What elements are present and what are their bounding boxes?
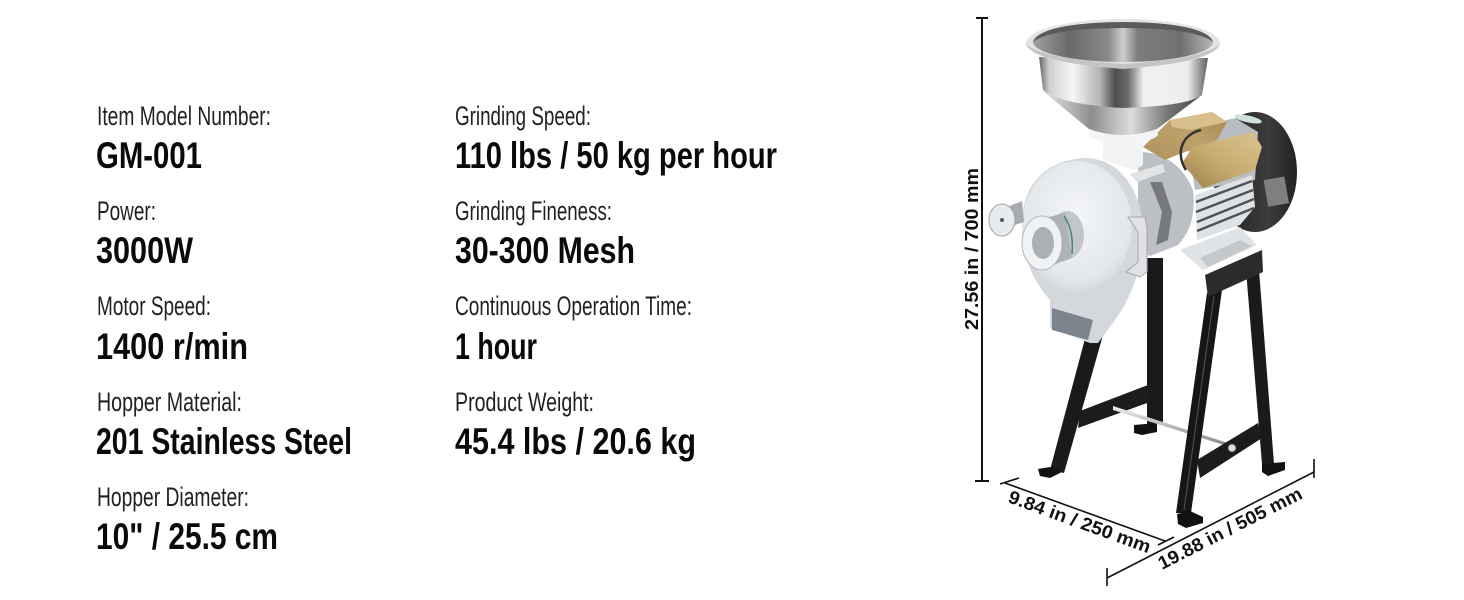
motor black end cap xyxy=(1213,112,1297,232)
spec: grinding fineness xyxy=(455,196,635,271)
stand legs xyxy=(1038,250,1285,528)
spec: hopper material: 201 Stainless Steel xyxy=(96,421,352,462)
spec: continuous operation time: 1 hour xyxy=(455,326,537,367)
dimension: width xyxy=(1107,459,1314,586)
outlet port xyxy=(1022,211,1084,270)
spec: continuous operation time xyxy=(455,291,692,367)
chute opening xyxy=(1052,308,1093,340)
spec: grinding fineness: 30-300 Mesh xyxy=(455,230,635,271)
dimension: depth xyxy=(1000,478,1174,557)
spec: continuous operation time: Continuous Operation Time: xyxy=(455,291,692,321)
spec: power: 3000W xyxy=(96,230,193,271)
spec column: left xyxy=(96,101,352,557)
spec: power: Power: xyxy=(97,196,156,226)
white feed neck xyxy=(1103,138,1165,182)
adjuster knob xyxy=(989,201,1024,236)
spec column: right xyxy=(455,101,777,462)
spec: item model number: GM-001 xyxy=(96,135,202,176)
dimension: depth: 9.84 in / 250 mm xyxy=(1006,486,1154,557)
hopper collar xyxy=(1088,125,1158,143)
hinge xyxy=(1126,217,1147,277)
spec: grinding speed xyxy=(455,101,777,176)
clamp arm xyxy=(1150,182,1172,245)
motor label plate xyxy=(1264,176,1289,207)
spec: item model number: Item Model Number: xyxy=(97,101,271,131)
spec: motor speed: 1400 r/min xyxy=(96,326,248,367)
dimension: width: 19.88 in / 505 mm xyxy=(1154,483,1305,574)
spec: product weight xyxy=(455,387,696,462)
spec: motor speed: Motor Speed: xyxy=(97,291,211,321)
motor ribbed body xyxy=(1180,175,1257,270)
spec: hopper diameter xyxy=(96,482,278,557)
spec: hopper material xyxy=(96,387,352,462)
spec: item model number xyxy=(96,101,271,176)
spec: grinding fineness: Grinding Fineness: xyxy=(455,196,612,226)
gold capacitor xyxy=(1181,130,1262,188)
green badge xyxy=(1234,113,1262,125)
spec: hopper diameter: Hopper Diameter: xyxy=(97,482,249,512)
spec: product weight: Product Weight: xyxy=(455,387,594,417)
spec: hopper diameter: 10" / 25.5 cm xyxy=(96,516,278,557)
dimension: height: 27.56 in / 700 mm xyxy=(961,168,982,330)
product illustration: grain grinder xyxy=(989,19,1297,528)
grinder neck casting xyxy=(1138,152,1194,256)
stainless hopper xyxy=(1026,19,1220,135)
spec: motor speed xyxy=(96,291,248,367)
spec: grinding speed: 110 lbs / 50 kg per hour xyxy=(455,135,777,176)
spec: hopper material: Hopper Material: xyxy=(97,387,242,417)
gold motor box xyxy=(1143,112,1227,160)
grinder housing xyxy=(1022,158,1143,343)
dimension: height xyxy=(961,18,989,481)
grinder disc face xyxy=(1022,161,1132,291)
spec: grinding speed: Grinding Speed: xyxy=(455,101,591,131)
spec: product weight: 45.4 lbs / 20.6 kg xyxy=(455,421,696,462)
spec: power xyxy=(96,196,193,271)
motor silver collar xyxy=(1185,118,1258,190)
